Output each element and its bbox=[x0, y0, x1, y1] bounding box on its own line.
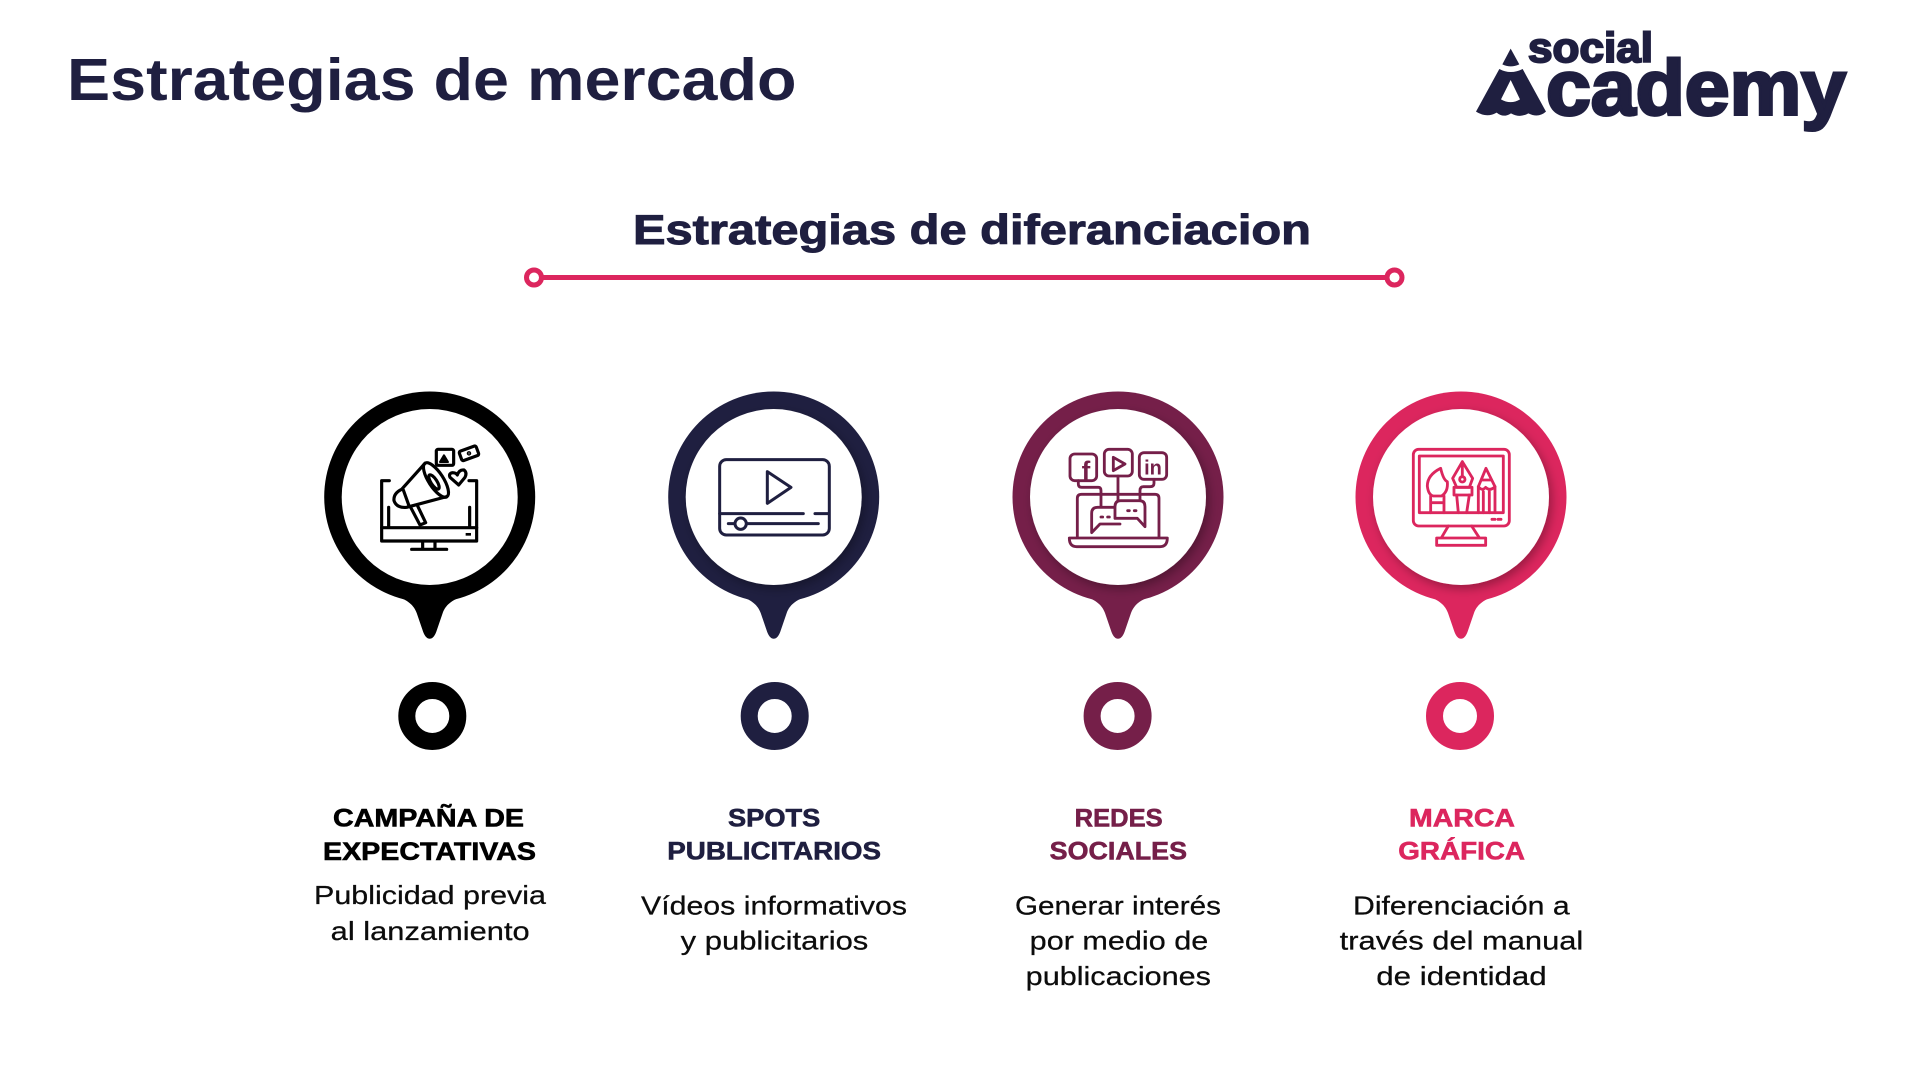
heading: CAMPAÑA DE bbox=[333, 803, 524, 833]
heading: EXPECTATIVAS bbox=[323, 838, 536, 866]
icon: social networks on laptop: f bbox=[1082, 455, 1091, 485]
heading underline with end circles bbox=[526, 270, 1402, 285]
heading: SPOTS bbox=[728, 805, 820, 833]
heading: SOCIALES bbox=[1050, 837, 1187, 865]
pin marker wine bbox=[1012, 392, 1224, 639]
icon: social networks on laptop bbox=[1069, 449, 1167, 547]
description bbox=[314, 880, 547, 946]
logo wordmark: social: social bbox=[1528, 24, 1653, 71]
heading: GRÁFICA bbox=[1398, 836, 1525, 865]
panel: spots publicitarios bbox=[641, 392, 907, 955]
title: Estrategias de mercado bbox=[67, 47, 796, 113]
description: Diferenciación a bbox=[1353, 890, 1570, 920]
icon: design tools on monitor bbox=[1413, 449, 1509, 545]
description: Vídeos informativos bbox=[641, 890, 907, 920]
description: través del manual bbox=[1340, 925, 1583, 955]
description: al lanzamiento bbox=[331, 916, 530, 946]
ring marker bbox=[1434, 690, 1486, 742]
description: y publicitarios bbox=[681, 925, 868, 955]
logo wordmark: cademy: cademy bbox=[1546, 44, 1846, 132]
panel: campaña de expectativas bbox=[314, 392, 547, 946]
panel: marca gráfica bbox=[1340, 392, 1583, 991]
description bbox=[1340, 890, 1583, 991]
description: de identidad bbox=[1376, 961, 1547, 991]
heading: PUBLICITARIOS bbox=[667, 837, 881, 865]
description: Generar interés bbox=[1015, 890, 1221, 920]
logo: social Academy bbox=[1476, 24, 1846, 132]
icon: megaphone on monitor bbox=[382, 446, 479, 549]
heading: MARCA bbox=[1409, 805, 1515, 833]
heading bbox=[1398, 805, 1525, 865]
section heading: Estrategias de diferanciacion bbox=[633, 206, 1311, 253]
ring marker bbox=[407, 690, 458, 742]
heading bbox=[1050, 805, 1187, 865]
panel: redes sociales bbox=[1012, 392, 1224, 991]
heading bbox=[323, 803, 536, 866]
description bbox=[1015, 890, 1221, 991]
ring marker bbox=[1092, 690, 1143, 742]
pin marker navy bbox=[668, 392, 879, 639]
icon: social networks on laptop: in bbox=[1144, 457, 1162, 479]
description: publicaciones bbox=[1026, 961, 1211, 991]
description bbox=[641, 890, 907, 955]
description: por medio de bbox=[1030, 925, 1208, 955]
description: Publicidad previa bbox=[314, 880, 547, 910]
heading bbox=[667, 805, 881, 865]
icon: video player bbox=[720, 460, 829, 535]
pin marker pink bbox=[1356, 392, 1566, 639]
pin marker black bbox=[324, 392, 535, 639]
logo pencil letter A bbox=[1476, 49, 1546, 116]
heading: REDES bbox=[1075, 805, 1163, 833]
ring marker bbox=[749, 690, 800, 742]
